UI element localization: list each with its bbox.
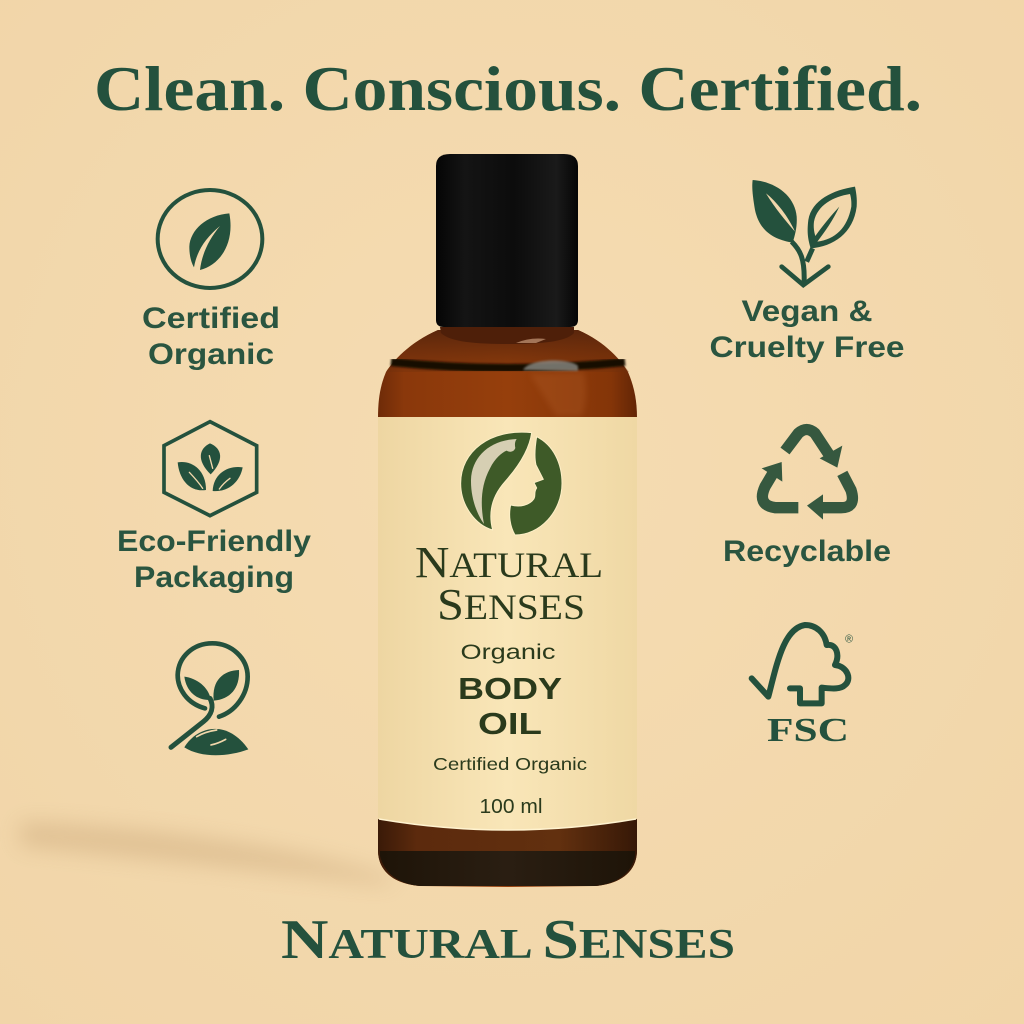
glare bbox=[523, 360, 578, 371]
product bottle: SENSES bbox=[437, 580, 585, 629]
product bottle: OIL bbox=[478, 706, 542, 741]
shoulder dark band bbox=[391, 362, 625, 368]
feature: eco-friendly packaging bbox=[117, 422, 311, 594]
label volume: 100 ml bbox=[480, 796, 542, 818]
label lower edge bbox=[379, 819, 636, 830]
icon: hexagon with leaves bbox=[164, 422, 257, 516]
label: Recyclable bbox=[723, 535, 891, 568]
brand footer: NATURAL SENSES bbox=[281, 909, 735, 971]
feature: vegan and cruelty free bbox=[710, 180, 904, 364]
icon: plant with two leaves bbox=[752, 180, 857, 285]
logo: woman profile and leaf bbox=[461, 432, 562, 535]
feature: FSC mark bbox=[752, 625, 853, 749]
bottle body bbox=[378, 330, 637, 887]
neck highlight bbox=[516, 338, 546, 343]
label: Certified bbox=[142, 302, 280, 335]
dark oil in base bbox=[380, 851, 635, 886]
icon: sprout in circle bbox=[171, 643, 248, 755]
label certification: Certified Organic bbox=[433, 754, 587, 774]
bottle cap bbox=[436, 154, 578, 327]
bottle label bbox=[378, 417, 637, 830]
feature: certified organic bbox=[142, 190, 280, 371]
label: Eco-Friendly bbox=[117, 525, 311, 558]
title: Clean. Conscious. Certified. bbox=[94, 53, 922, 124]
feature: recyclable bbox=[723, 429, 891, 568]
FSC wordmark: FSC bbox=[767, 712, 849, 749]
hair streak bbox=[471, 439, 517, 524]
label brand name: NATURAL bbox=[415, 538, 603, 587]
icon: leaf in circle bbox=[158, 190, 262, 288]
feature: eco-friendly packaging: Packaging bbox=[134, 561, 294, 594]
feature: vegan and cruelty free: Cruelty Free bbox=[710, 331, 904, 364]
label: Vegan & bbox=[742, 295, 872, 328]
feature: certified organic: Organic bbox=[148, 338, 274, 371]
label product type: Organic bbox=[460, 641, 556, 664]
icon: recycling arrows bbox=[762, 429, 852, 520]
product bottle bbox=[378, 154, 637, 887]
hair lobe bbox=[461, 432, 532, 530]
face lobe bbox=[510, 437, 562, 535]
bottle shadow bbox=[20, 822, 400, 884]
product bottle: BODY bbox=[458, 671, 562, 706]
neck ring bbox=[440, 327, 574, 344]
registered mark: ® bbox=[845, 633, 853, 645]
shoulder shade bbox=[386, 330, 629, 372]
bottle base bbox=[378, 819, 637, 886]
